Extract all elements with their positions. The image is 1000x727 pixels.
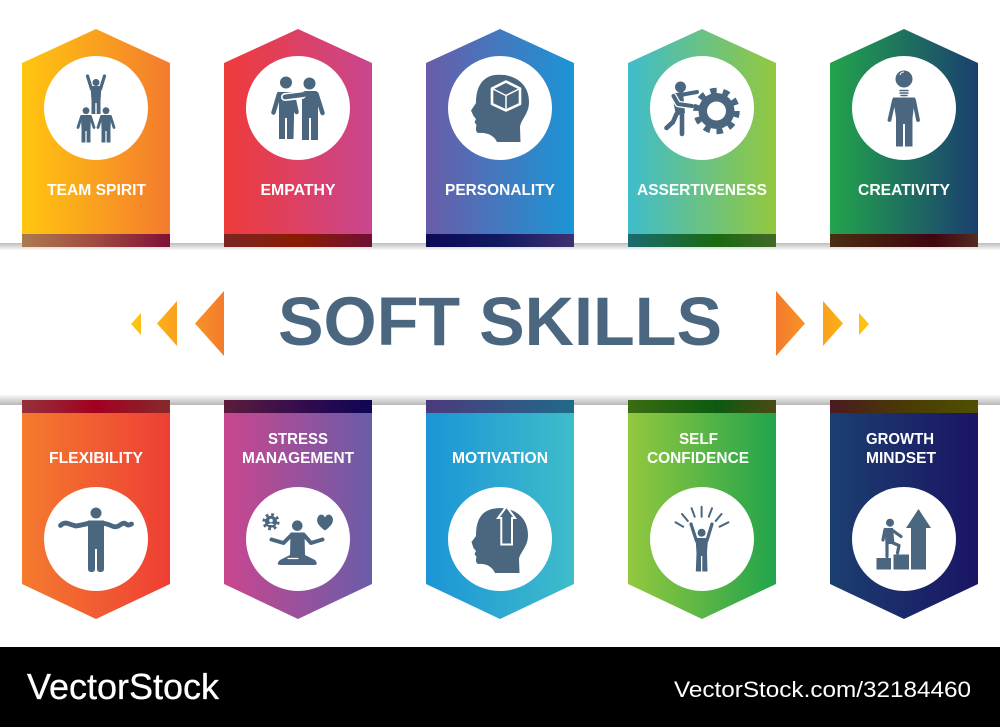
banner shape [830,29,978,247]
icon: cheering person [676,507,728,572]
label line 2: CONFIDENCE [647,450,749,467]
icon: person with light bulb head [890,70,918,146]
banner shape [830,400,978,619]
icon: comforting people [274,76,322,140]
right arrows [776,291,869,356]
label: MOTIVATION [452,450,548,467]
label: EMPATHY [260,182,336,199]
icon: people pyramid [78,76,114,142]
banner shape [224,400,372,619]
icon circle [448,56,552,160]
footer bar [0,647,1000,727]
banner: stress management [224,400,372,619]
icon circle [650,487,754,591]
label: STRESS [268,431,328,448]
banner dark band [224,234,372,247]
label: ASSERTIVENESS [637,182,767,199]
banner: personality [426,29,574,247]
left arrows [131,291,224,356]
footer url: VectorStock.com/32184460 [674,677,971,702]
label: TEAM SPIRIT [47,182,146,199]
banner dark band [22,234,170,247]
label line 2: MINDSET [866,450,936,467]
label: GROWTH [866,431,934,448]
icon circle [448,487,552,591]
lower shadow bar [0,395,1000,405]
icon circle [650,56,754,160]
banner dark band [224,400,372,413]
label: CREATIVITY [858,182,950,199]
title: SOFT SKILLS [278,283,722,360]
banner dark band [426,400,574,413]
icon: head with cube [471,75,529,142]
banner shape [426,400,574,619]
upper shadow bar [0,243,1000,250]
banner: empathy [224,29,372,247]
banner: motivation [426,400,574,619]
banner: creativity [830,29,978,247]
banner: team spirit [22,29,170,247]
icon circle [852,487,956,591]
banner shape [628,29,776,247]
banner: assertiveness [628,29,776,247]
banner dark band [830,400,978,413]
icon: person pushing gear [666,82,737,134]
banner dark band [628,400,776,413]
icon: person climbing steps with arrow [876,509,931,570]
banner dark band [22,400,170,413]
banner: flexibility [22,400,170,619]
icon circle [44,487,148,591]
label: SELF [679,431,718,448]
icon circle [246,487,350,591]
banner shape [22,29,170,247]
icon: head with up arrow [472,506,528,573]
icon circle [44,56,148,160]
label: FLEXIBILITY [49,450,143,467]
banner shape [224,29,372,247]
banner: self confidence [628,400,776,619]
banner dark band [426,234,574,247]
icon: meditating person with gear and heart [264,514,333,565]
banner shape [426,29,574,247]
icon circle [246,56,350,160]
icon: flexible person [60,508,132,572]
footer logo: VectorStock [27,666,220,707]
icon circle [852,56,956,160]
banner dark band [628,234,776,247]
banner dark band [830,234,978,247]
banner: growth mindset [830,400,978,619]
banner shape [628,400,776,619]
label: PERSONALITY [445,182,555,199]
label line 2: MANAGEMENT [242,450,354,467]
banner shape [22,400,170,619]
